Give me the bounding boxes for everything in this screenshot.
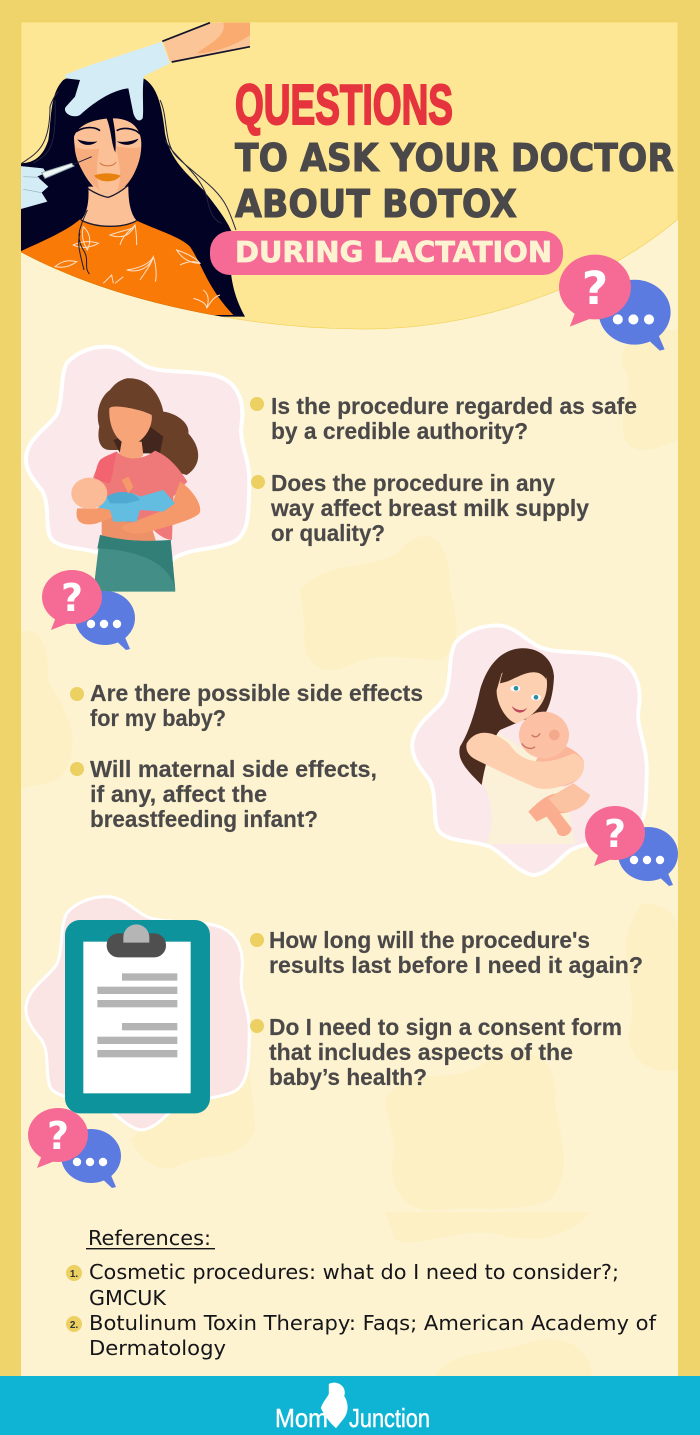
illustration: woman receiving botox injection [20,23,250,317]
question list one: Is the procedure regarded as safe [271,393,637,419]
logo: MomJunction [275,1383,430,1433]
question list three: that includes aspects of the [269,1039,573,1065]
reference two [66,1311,657,1360]
illustration: clipboard [26,897,249,1130]
icon: chat bubbles three: ? [47,1114,69,1158]
title [235,73,674,227]
icon: chat bubbles two: ? [604,812,626,856]
reference one [66,1260,619,1310]
pill: during lactation [210,231,563,275]
icon: chat bubbles three [28,1108,121,1188]
reference one: Cosmetic procedures: what do I need to consider?; [89,1260,619,1284]
reference one: 1. [70,1269,78,1280]
logo: MomJunction: Junction [349,1403,430,1433]
heading: questions: QUESTIONS [235,73,453,137]
question list two: Will maternal side effects, [90,756,377,782]
question list two [70,680,423,832]
question list three [250,927,643,1090]
header banner [21,22,678,329]
question list one: way affect breast milk supply [270,495,589,521]
illustration: mother hugging baby [412,625,647,875]
question list one: Does the procedure in any [271,470,555,496]
logo: MomJunction: Mom [275,1403,328,1433]
question list one: by a credible authority? [271,418,528,444]
question list two: Are there possible side effects [90,680,423,706]
icon: chat bubbles one: ? [61,576,83,620]
reference two: Dermatology [89,1336,226,1360]
question list two: breastfeeding infant? [90,806,318,832]
references heading: References: [88,1226,211,1250]
panel: procedure safety [26,347,637,650]
question list three: baby’s health? [269,1064,427,1090]
question list two: if any, affect the [90,781,267,807]
icon: chat bubbles header: ? [582,262,608,315]
question list two: for my baby? [90,705,226,731]
illustration: breastfeeding mother [26,347,249,592]
question list three: Do I need to sign a consent form [269,1014,622,1040]
icon: chat bubbles header [559,255,671,351]
icon: chat bubbles two [585,806,678,886]
reference two: 2. [70,1320,78,1331]
references [66,1226,657,1360]
question list three: results last before I need it again? [269,952,643,978]
heading line: about botox: ABOUT BOTOX [235,182,517,227]
panel: duration and consent [26,897,643,1188]
pill: during lactation: DURING LACTATION [235,236,552,269]
reference one: GMCUK [89,1286,167,1310]
question list one: or quality? [271,520,385,546]
reference two: Botulinum Toxin Therapy: Faqs; American Academy of [89,1311,657,1335]
question list three: How long will the procedure's [269,927,590,953]
panel: side effects [70,625,678,886]
icon: chat bubbles one [42,570,135,650]
question list one [250,393,637,546]
footer band [0,1376,700,1435]
